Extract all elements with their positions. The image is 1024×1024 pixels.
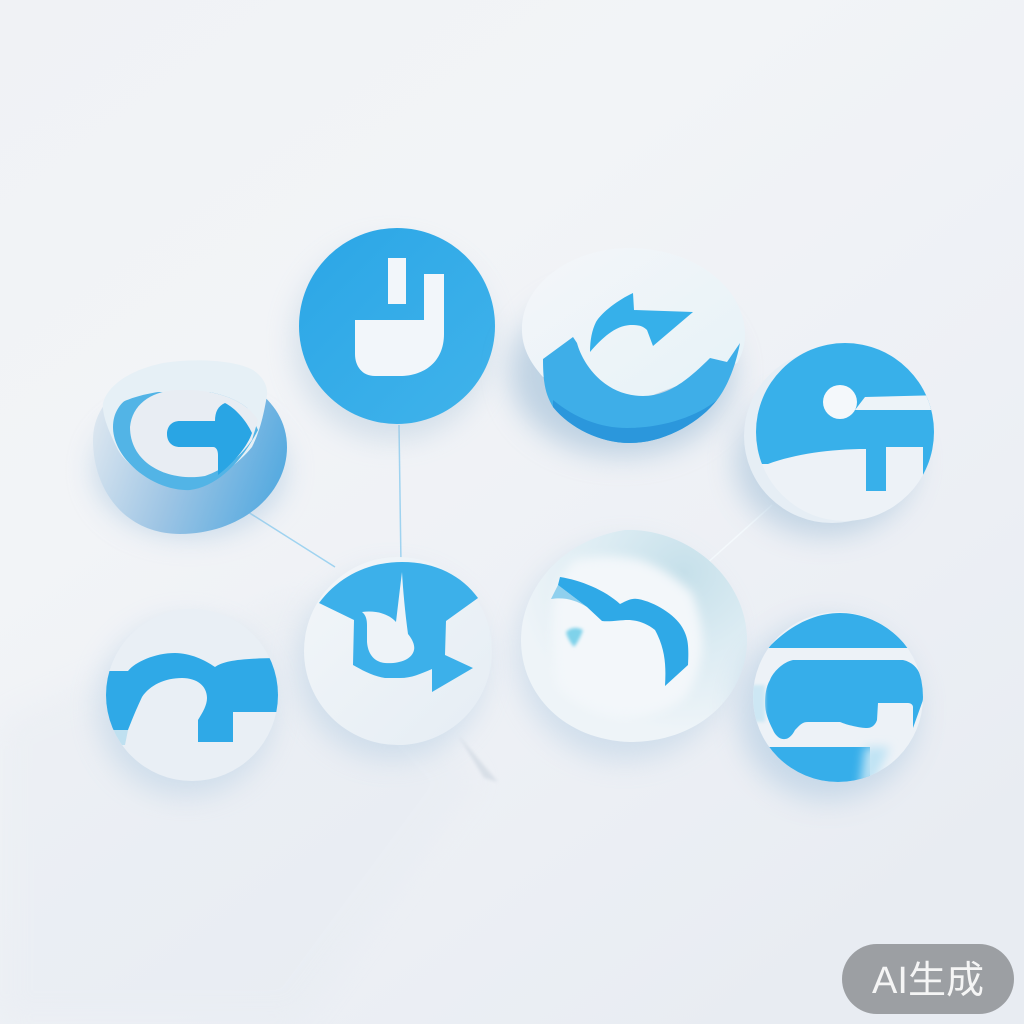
disc rim	[553, 400, 717, 443]
refresh arrow	[590, 293, 693, 352]
infographic canvas	[88, 228, 1014, 1014]
blue wing	[558, 577, 688, 686]
inner face	[130, 390, 258, 477]
dot	[566, 628, 583, 647]
icon: right faucet disc	[735, 340, 945, 536]
icon: bottom centre disc	[298, 557, 492, 759]
background light facets	[0, 590, 498, 1024]
icon: bottom left disc	[98, 609, 290, 796]
icon: bottom centre-right glass disc	[517, 530, 747, 760]
blue cap	[319, 562, 478, 692]
top cap	[768, 613, 908, 648]
icon: top right refresh disc	[510, 248, 745, 456]
badge: AI generated	[842, 944, 1014, 1014]
lens top cover	[113, 363, 265, 420]
icon: left arrow glass disc	[93, 360, 287, 536]
faucet handle slot	[855, 395, 932, 410]
glass base	[93, 370, 287, 534]
icon: top centre hand-mixer disc	[294, 228, 495, 440]
lower band	[770, 747, 870, 782]
arrow	[167, 403, 252, 475]
droplet	[362, 572, 414, 663]
badge: AI generated: AI生成	[872, 960, 984, 1002]
inner lens	[552, 557, 703, 718]
light wing	[551, 585, 587, 607]
left fade	[750, 685, 765, 722]
blue crescent	[543, 337, 740, 443]
icon: bottom right goggles disc	[738, 612, 924, 800]
blue ring	[113, 392, 258, 490]
goggles body	[765, 660, 924, 739]
lens rim	[103, 360, 267, 488]
connector lines	[248, 425, 772, 567]
disc face	[522, 248, 745, 400]
